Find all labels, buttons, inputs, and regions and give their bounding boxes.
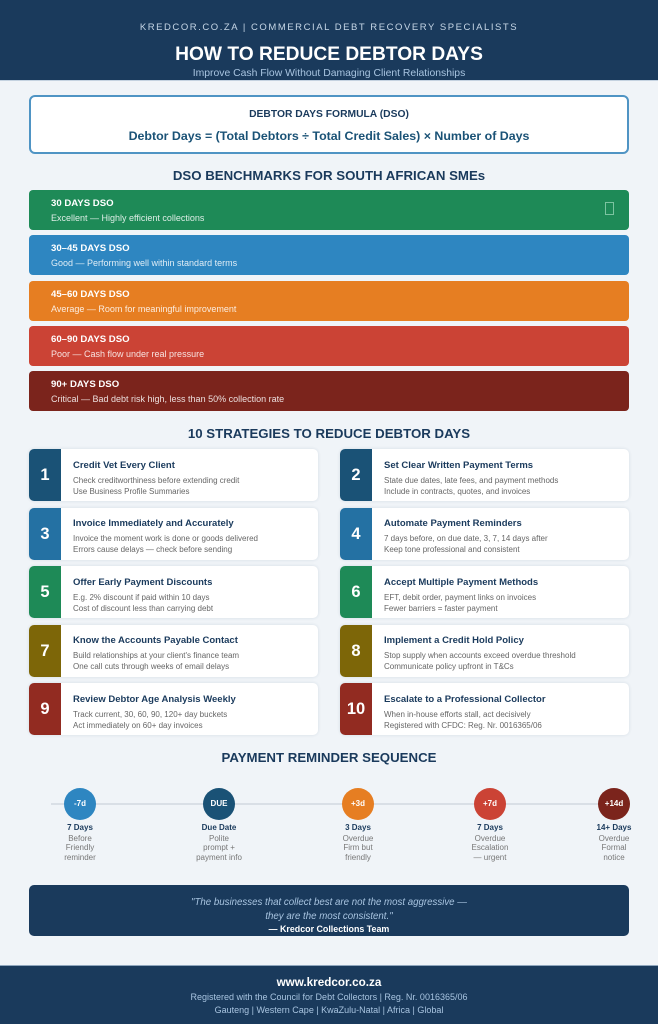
footer registration: Gauteng | Western Cape | KwaZulu-Natal | Africa | Global [215, 1004, 443, 1014]
benchmark: 45–60 days: Average — Room for meaningful improvement [51, 304, 236, 314]
subtitle: Improve Cash Flow Without Damaging Client Relationships [193, 68, 465, 79]
benchmark: 30–45 days: 30–45 DAYS DSO [51, 242, 130, 254]
text: Polite [209, 834, 229, 842]
footer [0, 965, 658, 1024]
benchmark: 30 days: 30 DAYS DSO [51, 198, 114, 208]
strategy 6: Accept Multiple Payment Methods [384, 576, 538, 588]
icon: missing glyph box [605, 202, 614, 215]
step: 7 days overdue [472, 788, 508, 862]
strategy 1: Use Business Profile Summaries [73, 487, 189, 496]
strategy 10: 10 [347, 700, 365, 718]
text: friendly [345, 853, 371, 862]
text: +14d [605, 799, 623, 808]
strategy 4: 4 [351, 524, 361, 542]
strategy 7: 7 [40, 642, 50, 660]
text: Overdue [599, 834, 629, 842]
strategy 1: 1 [40, 466, 50, 484]
footer url: www.kredcor.co.za [277, 976, 381, 989]
strategy 10: Escalate to a Professional Collector [384, 694, 546, 704]
strategy 6: 6 [351, 583, 361, 601]
strategy 7: One call cuts through weeks of email delays [73, 662, 229, 671]
strategy 3: Invoice the moment work is done or goods delivered [73, 534, 258, 543]
strategy 4: 7 days before, on due date, 3, 7, 14 days after [384, 534, 548, 543]
step: 14+ days overdue [597, 788, 632, 862]
benchmark: 45–60 days: 45–60 DAYS DSO [51, 288, 130, 300]
header banner [0, 0, 658, 81]
strategy 2: 2 [351, 466, 361, 484]
strategy 3 [29, 508, 318, 560]
strategy 9: Act immediately on 60+ day invoices [73, 721, 203, 730]
strategy 3: Errors cause delays — check before sending [73, 545, 232, 554]
strategy 8: Stop supply when accounts exceed overdue threshold [384, 651, 576, 660]
text: DUE [211, 799, 227, 808]
benchmark: 30 days: Excellent — Highly efficient collections [51, 212, 204, 222]
text: reminder [64, 853, 96, 862]
strategy 8 [340, 624, 629, 676]
strategy 4 [340, 508, 629, 560]
text: Overdue [343, 834, 373, 842]
strategy 6 [340, 566, 629, 618]
text: 7 Days [67, 823, 93, 832]
text: notice [603, 853, 625, 862]
footer registration [190, 992, 468, 1015]
quote attribution: — Kredcor Collections Team [269, 924, 389, 934]
strategy 9: 9 [40, 700, 50, 718]
benchmark: 90+ days: 90+ DAYS DSO [51, 378, 119, 390]
strategy 7: Build relationships at your client's finance team [73, 651, 239, 660]
strategy 2: Include in contracts, quotes, and invoices [384, 487, 530, 496]
step: due date [196, 788, 242, 862]
strategy 9 [29, 683, 318, 735]
strategy 1: Credit Vet Every Client [73, 460, 175, 470]
text: Overdue [475, 834, 505, 842]
text: payment info [196, 853, 242, 862]
benchmark: 30–45 days [29, 235, 629, 275]
text: prompt + [203, 843, 235, 852]
panel: DSO formula [29, 95, 629, 154]
strategy 6: EFT, debit order, payment links on invoices [384, 592, 536, 602]
quote text [191, 896, 467, 922]
strategy 10 [340, 683, 629, 735]
strategy 8: Implement a Credit Hold Policy [384, 635, 524, 646]
footer registration: Registered with the Council for Debt Collectors | Reg. Nr. 0016365/06 [190, 992, 467, 1002]
strategy 10: When in-house efforts stall, act decisively [384, 710, 531, 718]
strategy 2 [340, 449, 629, 501]
strategy 10: Registered with CFDC: Reg. Nr. 0016365/06 [384, 721, 542, 730]
text: Formal [602, 843, 626, 852]
title: HOW TO REDUCE DEBTOR DAYS [175, 44, 483, 64]
benchmark: 60–90 days: Poor — Cash flow under real pressure [51, 348, 204, 358]
benchmark: 45–60 days [29, 281, 629, 321]
text: -7d [74, 799, 86, 808]
quote text: "The businesses that collect best are not the most aggressive — [191, 896, 467, 908]
strategy 9: Review Debtor Age Analysis Weekly [73, 694, 236, 704]
header tagline: KREDCOR.CO.ZA | COMMERCIAL DEBT RECOVERY SPECIALISTS [140, 22, 518, 33]
strategy 5: Offer Early Payment Discounts [73, 576, 212, 588]
timeline [51, 803, 598, 805]
strategy 5 [29, 566, 318, 618]
strategy 8: 8 [351, 642, 361, 660]
strategy 5: E.g. 2% discount if paid within 10 days [73, 592, 210, 602]
text: 14+ Days [597, 823, 631, 832]
benchmark: 30 days [29, 190, 629, 230]
benchmark: 60–90 days: 60–90 DAYS DSO [51, 334, 130, 344]
text: Firm but [343, 843, 373, 852]
quote text: they are the most consistent." [265, 911, 393, 922]
strategy 1: Check creditworthiness before extending credit [73, 476, 239, 484]
formula: Debtor Days = (Total Debtors ÷ Total Credit Sales) × Number of Days [129, 129, 529, 143]
benchmark: 90+ days [29, 371, 629, 411]
strategy 3: 3 [40, 524, 50, 542]
strategy 8: Communicate policy upfront in T&Cs [384, 662, 514, 671]
quote panel [29, 885, 629, 936]
heading: benchmarks: DSO BENCHMARKS FOR SOUTH AFRICAN SMEs [173, 168, 485, 183]
text: Escalation [472, 843, 508, 852]
text: Due Date [202, 823, 236, 832]
text: 7 Days [477, 823, 503, 832]
strategy 7: Know the Accounts Payable Contact [73, 635, 238, 646]
text: +7d [483, 799, 497, 808]
text: Before [68, 834, 92, 842]
strategy 3: Invoice Immediately and Accurately [73, 518, 234, 529]
strategy 4: Keep tone professional and consistent [384, 545, 520, 554]
strategy 4: Automate Payment Reminders [384, 518, 522, 529]
strategy 7 [29, 624, 318, 676]
text: 3 Days [345, 823, 371, 832]
benchmark: 30–45 days: Good — Performing well within standard terms [51, 258, 237, 268]
strategy 9: Track current, 30, 60, 90, 120+ day buckets [73, 710, 227, 718]
strategy 2: Set Clear Written Payment Terms [384, 460, 533, 470]
heading: strategies: 10 STRATEGIES TO REDUCE DEBTOR DAYS [188, 426, 470, 441]
text: +3d [351, 799, 365, 808]
strategy 5: 5 [40, 583, 50, 601]
strategy 2: State due dates, late fees, and payment methods [384, 476, 558, 484]
step: 7 days before [64, 788, 96, 862]
strategy 6: Fewer barriers = faster payment [384, 604, 498, 613]
text: — urgent [474, 853, 506, 862]
benchmark: 90+ days: Critical — Bad debt risk high, less than 50% collection rate [51, 394, 284, 404]
benchmark: 60–90 days [29, 326, 629, 366]
formula label: DEBTOR DAYS FORMULA (DSO) [249, 109, 409, 120]
strategy 5: Cost of discount less than carrying debt [73, 604, 213, 613]
heading: reminder sequence: PAYMENT REMINDER SEQUENCE [222, 750, 436, 765]
text: Friendly [66, 843, 94, 852]
strategy 1 [29, 449, 318, 501]
step: 3 days overdue [342, 788, 374, 862]
